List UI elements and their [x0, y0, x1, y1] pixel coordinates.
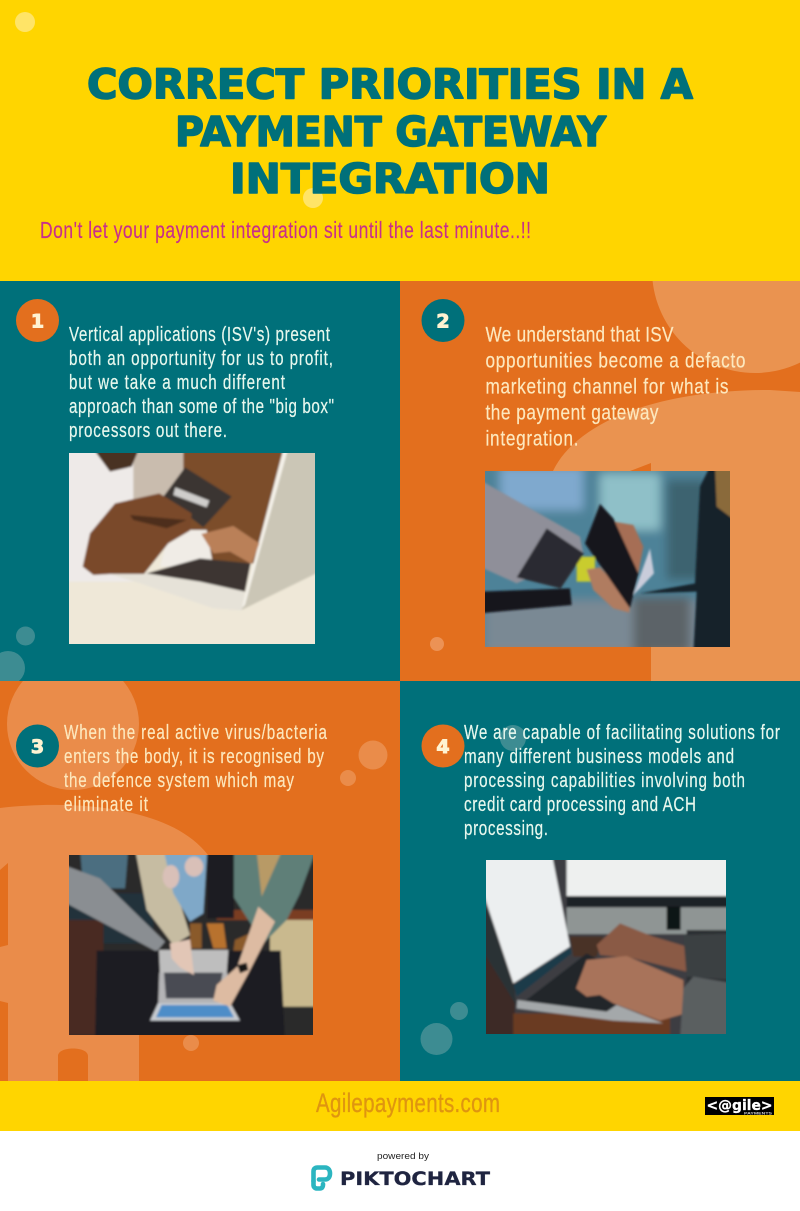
text: step 1: processors out there. [69, 419, 227, 442]
text: step 1: but we take a much different [69, 371, 285, 394]
title [87, 60, 693, 203]
photo: phone payment at reader [485, 471, 730, 647]
badge: number 2 [422, 299, 464, 342]
text: step 2: integration. [486, 427, 579, 451]
title: CORRECT PRIORITIES IN A [87, 60, 693, 108]
badge: number 4 [422, 724, 464, 768]
text: step 3: the defence system which may [64, 769, 294, 792]
badge: number 1 [16, 299, 59, 342]
text: step 4: credit card processing and ACH [464, 793, 696, 816]
badge: number 4: 4 [436, 736, 450, 758]
text: step 4: processing. [464, 817, 548, 840]
text: step 4: We are capable of facilitating solutions for [464, 721, 780, 744]
text: step 2: We understand that ISV [486, 323, 674, 347]
header panel [0, 0, 800, 281]
website link: Agilepayments.com [316, 1088, 500, 1119]
badge: number 3: 3 [31, 736, 44, 758]
logo: agile payments: <@gile> [706, 1098, 772, 1114]
photo: hand holding card at laptop [69, 453, 315, 644]
icon: piktochart logo [314, 1168, 330, 1188]
badge: number 2: 2 [436, 310, 450, 332]
text: step 4 [464, 721, 780, 840]
title: INTEGRATION [230, 155, 550, 203]
text: step 2: opportunities become a defacto [486, 349, 746, 373]
text: step 1 [69, 323, 334, 442]
text: step 3: eliminate it [64, 793, 148, 816]
footer: powered by piktochart [0, 1131, 800, 1211]
text: step 2: the payment gateway [486, 401, 659, 425]
text: step 1: approach than some of the "big box" [69, 395, 334, 418]
text: step 4: many different business models and [464, 745, 734, 768]
text: step 3: enters the body, it is recognised by [64, 745, 324, 768]
title: PAYMENT GATEWAY [175, 108, 607, 156]
text: step 2: marketing channel for what is [486, 375, 729, 399]
badge: number 1: 1 [31, 310, 44, 332]
powered by label: powered by [377, 1151, 429, 1162]
text: step 3 [64, 721, 327, 816]
panel: step 2 [400, 281, 800, 681]
subtitle: Don't let your payment integration sit until the last minute..!! [40, 219, 531, 244]
photo: typing on a laptop [486, 860, 726, 1034]
footer band [0, 1081, 800, 1131]
text: step 1: Vertical applications (ISV's) present [69, 323, 330, 346]
photo: group around a laptop [69, 855, 313, 1035]
piktochart wordmark: PIKTOCHART [340, 1169, 490, 1190]
text: step 4: processing capabilities involving both [464, 769, 745, 792]
panel: step 4 [400, 681, 800, 1081]
panel: step 3 [0, 658, 400, 1081]
panel: step 1 [0, 281, 400, 685]
badge: number 3 [16, 724, 59, 768]
text: step 3: When the real active virus/bacteria [64, 721, 327, 744]
text: step 2 [486, 323, 746, 451]
logo: agile payments: PAYMENTS [744, 1112, 773, 1116]
text: step 1: both an opportunity for us to profit, [69, 347, 333, 370]
